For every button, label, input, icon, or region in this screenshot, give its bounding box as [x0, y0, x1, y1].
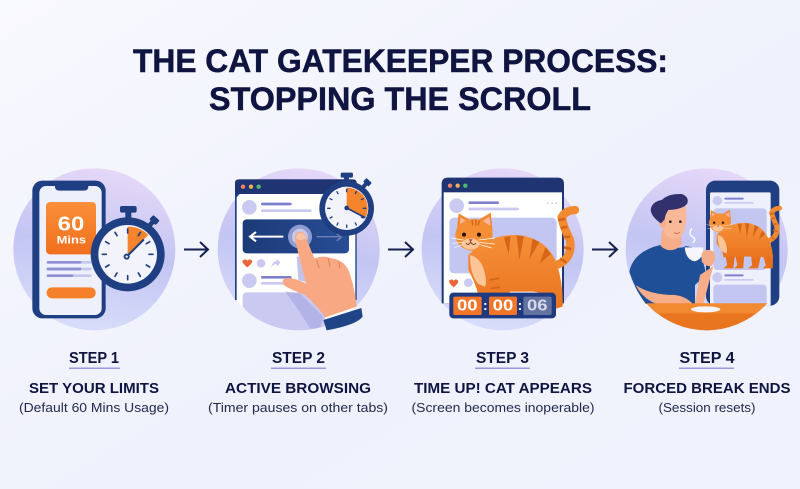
icon: phone with 60 minute limit: [32, 181, 106, 318]
icon: table with saucer: [646, 303, 768, 330]
icon: cat on phone: [707, 208, 780, 268]
caption: step 1: STEP 1: [69, 350, 119, 367]
caption: step 3: STEP 3: [476, 350, 529, 367]
caption: step 2: (Timer pauses on other tabs): [208, 401, 388, 415]
icon: browser feed: [235, 179, 357, 330]
caption: step 3: TIME UP! CAT APPEARS: [414, 381, 592, 397]
arrow: step 3 to step 4: [592, 242, 617, 257]
caption: step 3: (Screen becomes inoperable): [412, 401, 594, 415]
timer: 00:00:06: 00: [457, 298, 478, 315]
timer: 00:00:06: [449, 293, 556, 318]
panel: step 3 illustration: [422, 168, 584, 330]
arrow: step 2 to step 3: [388, 242, 413, 257]
icon: stopwatch: [91, 206, 165, 291]
caption: step 2: [208, 350, 388, 415]
icon: phone with 60 minute limit: Mins: [57, 234, 86, 246]
caption: step 4: FORCED BREAK ENDS: [624, 381, 791, 397]
title: STOPPING THE SCROLL: [209, 81, 591, 117]
caption: step 4: [624, 350, 791, 415]
caption: step 1: [19, 350, 169, 415]
icon: swiping hand: [282, 225, 363, 330]
title: [133, 43, 668, 117]
timer: 00:00:06: :: [518, 297, 522, 313]
panel: step 1 illustration: [13, 168, 175, 330]
panel: step 4 illustration: [620, 168, 788, 333]
icon: orange tabby cat: [451, 210, 575, 308]
icon: phone showing the cat: [706, 181, 779, 306]
arrow: step 1 to step 2: [184, 242, 208, 257]
title: THE CAT GATEKEEPER PROCESS:: [133, 43, 668, 79]
caption: step 3: [412, 350, 594, 415]
timer: 00:00:06: 06: [527, 298, 548, 315]
caption: step 1: (Default 60 Mins Usage): [19, 401, 169, 415]
caption: step 4: STEP 4: [680, 350, 735, 367]
caption: step 4: (Session resets): [658, 401, 756, 415]
icon: browser feed: [442, 178, 564, 303]
icon: man with coffee: [629, 194, 715, 307]
panel: step 2 illustration: [218, 168, 380, 330]
caption: step 1: SET YOUR LIMITS: [29, 381, 159, 397]
icon: stopwatch with larger elapsed wedge: [319, 173, 374, 236]
caption: step 2: STEP 2: [272, 350, 325, 367]
timer: 00:00:06: :: [483, 297, 488, 313]
icon: phone with 60 minute limit: 60: [58, 213, 84, 236]
caption: step 2: ACTIVE BROWSING: [225, 381, 371, 397]
timer: 00:00:06: 00: [493, 298, 513, 315]
